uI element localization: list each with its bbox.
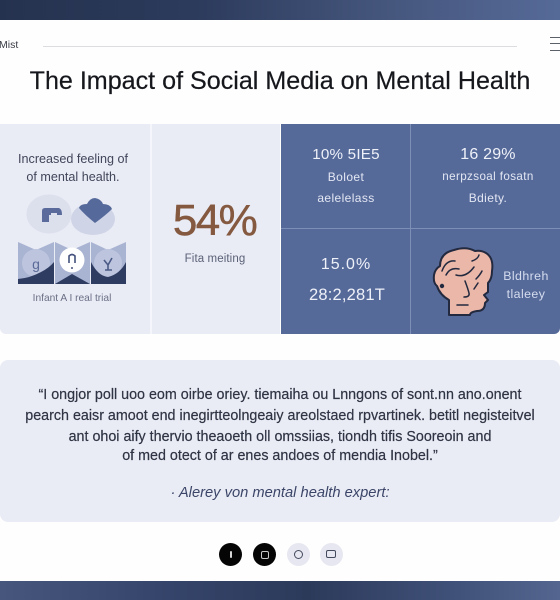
- panel: light statistics: [0, 124, 280, 334]
- top banner: [0, 0, 560, 20]
- panel: quote: [0, 360, 560, 522]
- icon: light button four: [320, 543, 343, 566]
- quote text: of med otect of ar enes andoes of mendia Inobel.”: [122, 448, 438, 464]
- divider: [281, 228, 560, 229]
- header rule: [43, 46, 517, 47]
- icon: frame centre: [55, 242, 90, 284]
- stat cell: top left: aelelelass: [317, 191, 375, 205]
- stat cell: bottom left: 28:2,281T: [309, 286, 385, 304]
- text: panel heading: of mental health.: [26, 170, 120, 184]
- icon: menu: [550, 37, 560, 51]
- quote text: [25, 387, 535, 464]
- stat cell: bottom left: [309, 256, 385, 304]
- bottom banner: [0, 581, 560, 600]
- icon: light button three: [287, 543, 310, 566]
- quote attribution: · Alerey von mental health expert:: [170, 485, 390, 501]
- stat cell: top right: 16 29%: [460, 146, 516, 163]
- icon: heart bubble: [71, 198, 115, 235]
- title: The Impact of Social Media on Mental Health: [30, 67, 530, 95]
- text: stat caption: Fita meiting: [185, 253, 245, 265]
- stat cell: top left: [312, 146, 380, 205]
- stat cell: top left: Boloet: [328, 170, 364, 184]
- divider: [150, 124, 152, 334]
- quote text: ant ohoi aify thervio theaoeth oll omssiias, tiondh tifis Sooreoin and: [69, 429, 491, 445]
- icon: frame left: g: [32, 256, 40, 272]
- icon: dark button one: [219, 543, 242, 566]
- stat: 54%: 54%: [173, 196, 256, 245]
- icon: frame right: [91, 242, 126, 284]
- stat cell: bottom right: [432, 247, 549, 316]
- stat cell: top left: 10% 5IE5: [312, 146, 380, 163]
- stat cell: top right: nerpzsoal fosatn: [442, 170, 534, 183]
- icon: head: [432, 247, 494, 316]
- quote text: pearch eaisr amoot end inegirtteolngeaiy areolstaed rpvartinek. betitl negisteitvel: [25, 408, 535, 424]
- stat cell: bottom left: 15.0%: [321, 256, 371, 273]
- divider: [410, 124, 411, 334]
- text: head caption: tlaleey: [507, 287, 545, 301]
- icon: dark button two: [253, 543, 276, 566]
- stat cell: top right: Bdiety.: [469, 191, 507, 205]
- text: head caption: Bldhreh: [503, 269, 549, 283]
- quote text: “I ongjor poll uoo eom oirbe oriey. tiemaiha ou Lnngons of sont.nn ano.onent: [39, 387, 521, 403]
- icon row: social buttons: [219, 543, 343, 566]
- text: head caption: [503, 269, 549, 301]
- text: illustration caption: Infant A I real trial: [33, 293, 111, 304]
- text: panel heading: Increased feeling of: [18, 152, 128, 166]
- text: panel heading: [18, 152, 128, 184]
- icon: left bubble: [26, 194, 72, 234]
- illustration: people and frames: [18, 194, 126, 284]
- panel: blue statistics: [281, 124, 560, 334]
- stat cell: top right: [442, 146, 534, 205]
